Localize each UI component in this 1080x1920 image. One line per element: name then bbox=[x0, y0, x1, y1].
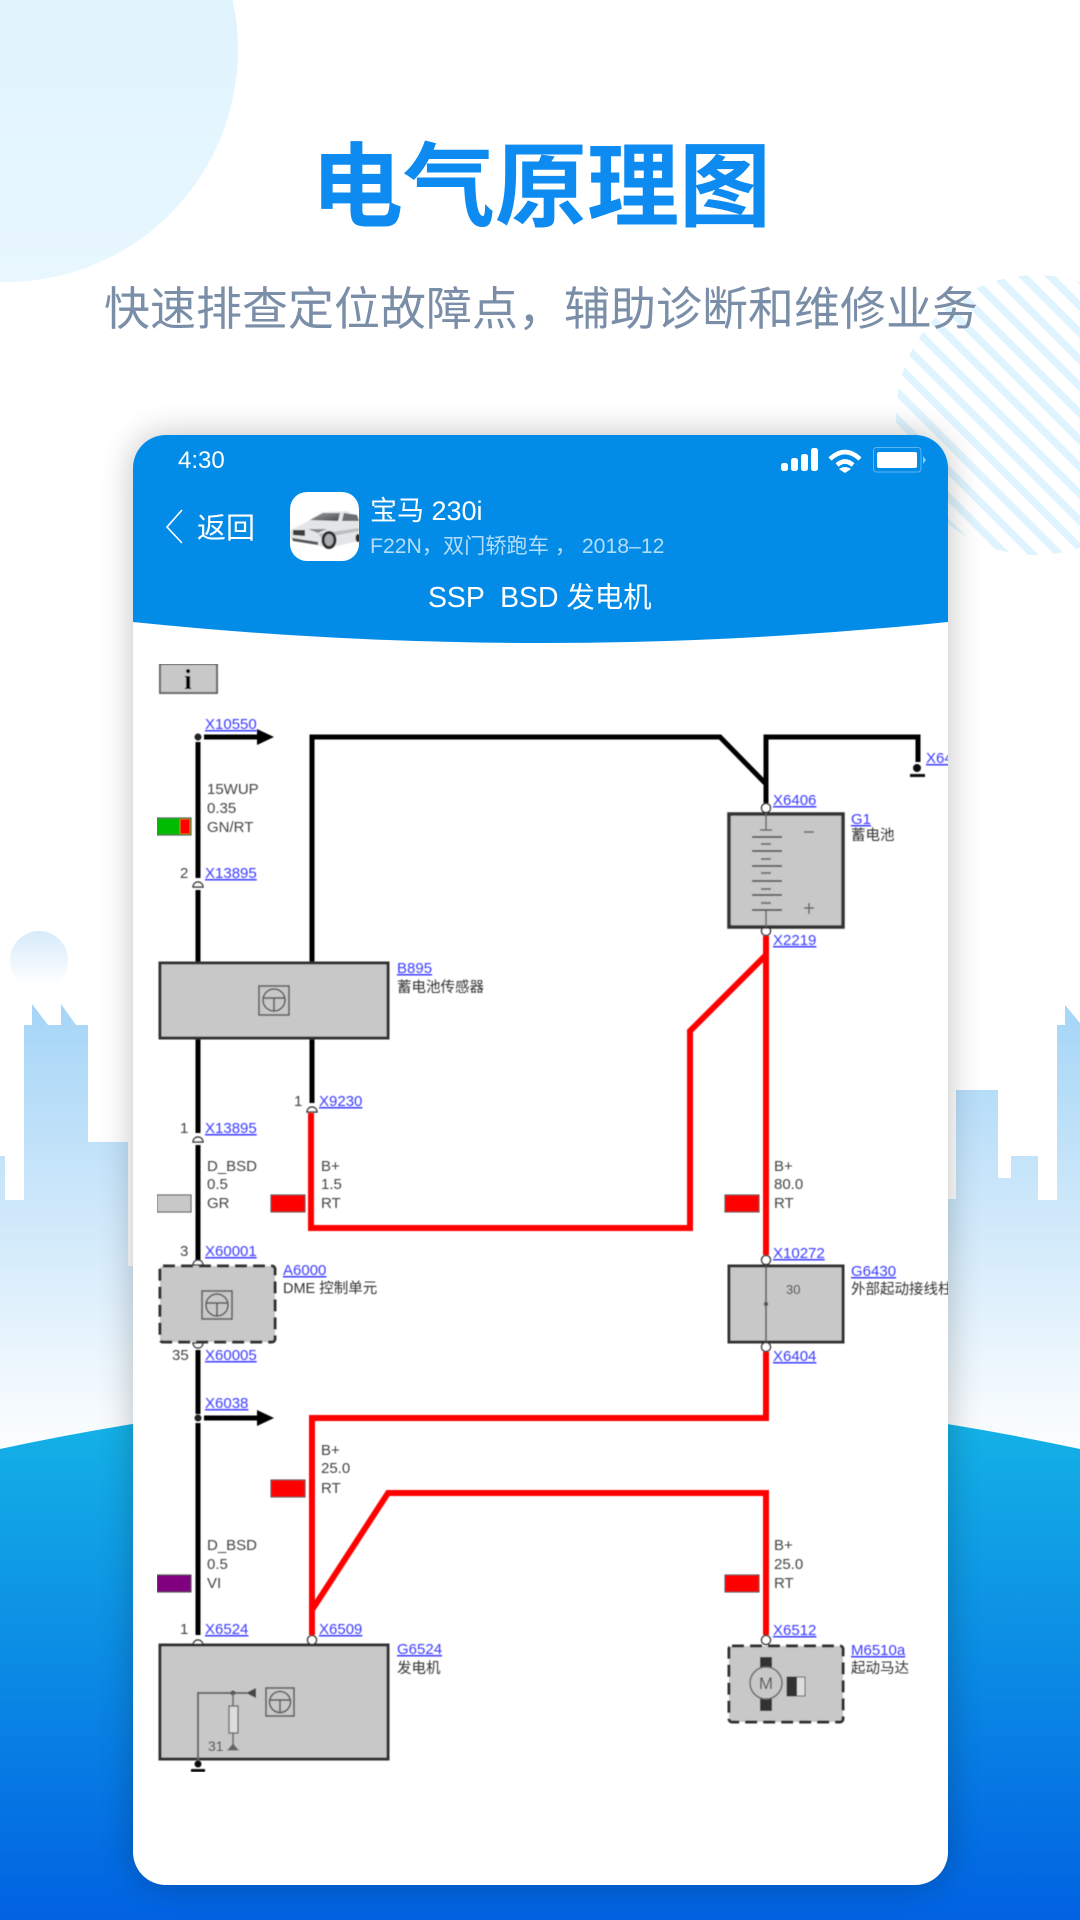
connector labels: X6038 bbox=[205, 1395, 248, 1412]
wire label: D_BSD GR bbox=[157, 1158, 257, 1212]
connector circles bbox=[308, 804, 770, 1644]
wire label: D_BSD GR: D_BSD bbox=[207, 1158, 257, 1175]
decorative striped circle: top right bbox=[896, 275, 1080, 555]
wire label: D_BSD GR: 0.5 bbox=[207, 1176, 228, 1193]
component: battery G1 bbox=[729, 811, 894, 927]
icon: battery bbox=[874, 448, 926, 472]
connector labels: X10550 bbox=[205, 716, 257, 733]
wire label: B+ 25.0 RT right: B+ bbox=[774, 1537, 793, 1554]
connector labels: 35 bbox=[172, 1347, 189, 1364]
wire label: B+ 1.5 RT: B+ bbox=[321, 1158, 340, 1175]
wire label: D_BSD VI bbox=[157, 1537, 257, 1592]
connector labels: X9230 bbox=[319, 1093, 362, 1110]
component: battery sensor B895: B895 bbox=[397, 960, 432, 977]
arrow: X10550 bbox=[194, 729, 274, 745]
blue curved ground bbox=[0, 1391, 1080, 1920]
component: generator G6524: 发电机 bbox=[397, 1660, 441, 1677]
status bar time: 4:30 bbox=[178, 447, 225, 474]
wire label: B+ 25.0 RT left: 25.0 bbox=[321, 1460, 350, 1477]
wire label: B+ 1.5 RT: 1.5 bbox=[321, 1176, 342, 1193]
component: generator G6524 bbox=[160, 1641, 442, 1772]
ground symbol: X64: X6401 bbox=[926, 750, 969, 767]
component: starter motor M6510a bbox=[729, 1642, 909, 1722]
wire label: B+ 1.5 RT bbox=[271, 1158, 342, 1212]
connector labels: X6512 bbox=[773, 1622, 816, 1639]
wire label: B+ 25.0 RT right: 25.0 bbox=[774, 1556, 803, 1573]
wire label: 15WUP GN/RT: 15WUP bbox=[207, 781, 259, 798]
city skyline background bbox=[0, 931, 1080, 1460]
back label: 返回 bbox=[197, 513, 255, 545]
info button: i bbox=[184, 665, 192, 696]
component: starter motor M6510a: 起动马达 bbox=[851, 1660, 909, 1677]
connector labels bbox=[172, 716, 825, 1639]
component: jump start post G6430 bbox=[729, 1263, 952, 1342]
wire label: B+ 25.0 RT left: B+ bbox=[321, 1442, 340, 1459]
wire label: 15WUP GN/RT: GN/RT bbox=[207, 819, 253, 836]
connector labels: X13895 bbox=[205, 1120, 257, 1137]
connector labels: X13895 bbox=[205, 865, 257, 882]
info button bbox=[160, 664, 217, 696]
wire label: B+ 80.0 RT bbox=[725, 1158, 803, 1212]
component: jump start post G6430: 30 bbox=[786, 1282, 800, 1297]
wire label: B+ 25.0 RT right: RT bbox=[774, 1575, 794, 1592]
red wires bbox=[311, 936, 766, 1635]
component: battery G1: 蓄电池 bbox=[851, 827, 894, 844]
component: jump start post G6430: G6430 bbox=[851, 1263, 896, 1280]
connector labels: X6406 bbox=[773, 792, 816, 809]
subtitle: 快速排查定位故障点，辅助诊断和维修业务 bbox=[104, 283, 978, 335]
vehicle details: F22N，双门轿跑车 ， 2018–12 bbox=[370, 534, 664, 558]
component: jump start post G6430: 外部起动接线柱 bbox=[851, 1281, 952, 1298]
component: battery G1: G1 bbox=[851, 811, 871, 828]
wire label: B+ 1.5 RT: RT bbox=[321, 1195, 341, 1212]
wire label: D_BSD GR: GR bbox=[207, 1195, 230, 1212]
component: battery sensor B895: 蓄电池传感器 bbox=[397, 979, 484, 996]
wire label: D_BSD VI: D_BSD bbox=[207, 1537, 257, 1554]
car thumbnail bbox=[290, 492, 360, 561]
wire label: B+ 25.0 RT right bbox=[725, 1537, 803, 1592]
black wires bbox=[198, 737, 918, 1635]
arrow: X6038 bbox=[194, 1410, 274, 1426]
wire label: B+ 80.0 RT: RT bbox=[774, 1195, 794, 1212]
component: starter motor M6510a: M6510a bbox=[851, 1642, 906, 1659]
phone shadow bbox=[133, 435, 948, 1885]
wire label: B+ 80.0 RT: B+ bbox=[774, 1158, 793, 1175]
wire label: 15WUP GN/RT: 0.35 bbox=[207, 800, 236, 817]
wire label: D_BSD VI: VI bbox=[207, 1575, 221, 1592]
connector labels: X60005 bbox=[205, 1347, 257, 1364]
wire label: D_BSD VI: 0.5 bbox=[207, 1556, 228, 1573]
title: 电气原理图 bbox=[311, 137, 771, 239]
connector labels: 3 bbox=[180, 1243, 188, 1260]
component: generator G6524: 31 bbox=[208, 1738, 224, 1754]
icon: signal bars bbox=[781, 448, 818, 471]
icon: wifi bbox=[830, 452, 860, 473]
connector labels: X6404 bbox=[773, 1348, 816, 1365]
component: battery sensor B895 bbox=[160, 960, 484, 1038]
connector labels: X60001 bbox=[205, 1243, 257, 1260]
connector labels: 1 bbox=[294, 1093, 302, 1110]
connector labels: X2219 bbox=[773, 932, 816, 949]
connector labels: X6524 bbox=[205, 1621, 248, 1638]
wire label: B+ 25.0 RT left: RT bbox=[321, 1480, 341, 1497]
page heading: SSP BSD 发电机 bbox=[428, 582, 652, 614]
connector labels: 2 bbox=[180, 865, 188, 882]
wire label: B+ 80.0 RT: 80.0 bbox=[774, 1176, 803, 1193]
app header bbox=[133, 435, 948, 643]
ground symbol: X64 bbox=[909, 752, 948, 778]
wire label: B+ 25.0 RT left bbox=[271, 1442, 350, 1497]
component: control unit A6000 bbox=[160, 1262, 377, 1342]
connector labels: X10272 bbox=[773, 1245, 825, 1262]
decorative circle: top left bbox=[0, 0, 238, 282]
vehicle name: 宝马 230i bbox=[370, 496, 483, 526]
component: generator G6524: G6524 bbox=[397, 1641, 442, 1658]
wire label: 15WUP GN/RT bbox=[157, 781, 259, 836]
component: control unit A6000: A6000 bbox=[283, 1262, 326, 1279]
connector labels: X6509 bbox=[319, 1621, 362, 1638]
component: control unit A6000: DME 控制单元 bbox=[283, 1280, 377, 1297]
connector arcs bbox=[193, 882, 317, 1645]
connector labels: 1 bbox=[180, 1621, 188, 1638]
back chevron bbox=[167, 510, 182, 543]
wiring diagram bbox=[157, 664, 969, 1772]
connector labels: 1 bbox=[180, 1120, 188, 1137]
component: starter motor M6510a: M bbox=[759, 1674, 773, 1693]
panel: phone screen bbox=[133, 435, 969, 1885]
